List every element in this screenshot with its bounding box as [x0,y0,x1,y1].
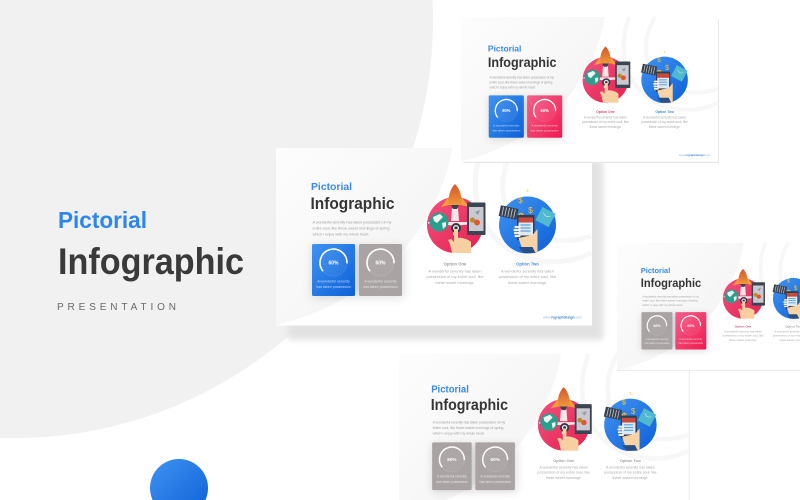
slide 2: top [461,17,718,162]
card: blue 60% [312,244,355,296]
card: pink 60%: has taken possession [678,341,704,345]
option two text: possession of my entire soul, like [499,274,556,279]
slide 3 bottom edge line [617,370,800,371]
icon: rocket and phone [427,184,486,253]
card shadow [489,97,564,139]
title: Infographic [310,194,394,213]
option one text: these sweet mornings. [436,280,474,285]
website credit: www.rvgraphdesign.com [679,153,711,157]
description: entire soul, like these sweet mornings of spring [433,426,503,430]
option two text [641,110,688,129]
option one text: these sweet mornings. [546,476,582,480]
description [312,220,392,236]
slide 4 right edge line [689,370,690,500]
card: blue 60%: has taken possession [492,128,521,132]
card: 60% right: 60% [491,457,500,462]
description: entire soul, like these sweet mornings of spring [642,299,698,303]
description [642,294,700,307]
title block [57,207,244,313]
heading: Pictorial: Pictorial [58,207,147,233]
title: Infographic [641,276,701,290]
website credit: www.rvgraphdesign.com [543,316,582,320]
card: pink 60% [675,312,706,350]
card: 60% left: has taken possession [436,480,468,484]
heading: Pictorial [431,385,469,396]
description: A wonderful serenity has taken possession of my [312,220,392,224]
description: which I enjoy with my whole heart. [312,232,370,236]
option two text: these sweet mornings. [649,125,681,129]
option two text: A wonderful serenity has taken [606,466,655,470]
slide 1 shadow [288,160,603,340]
card: grey 60%: has taken possession [363,285,398,289]
title: Infographic [431,397,508,414]
option one text [722,325,764,342]
option one text [537,459,590,480]
option one text [582,110,629,129]
option one text: Option One [735,325,752,329]
option one text: these sweet mornings. [590,125,621,129]
slide background [399,354,689,500]
option two text: A wonderful serenity has taken [643,116,686,120]
heading: Pictorial [641,266,670,275]
option two text: A wonderful serenity has taken [501,268,554,274]
icon: shopping phone [604,391,657,451]
decorative blue circle [150,459,208,500]
card: 60% right [475,442,515,490]
card: 60% left: 60% [447,457,457,462]
option one text: possession of my entire soul, like [426,274,484,279]
description: A wonderful serenity has taken possession of my [490,76,554,80]
option one text [426,262,484,285]
icon: shopping phone [641,50,688,103]
card shadow [432,444,517,492]
icon: shopping phone [773,273,800,319]
card: blue 60%: A wonderful serenity [493,124,520,128]
option one text: these sweet mornings. [729,338,757,342]
icon: rocket and phone [723,269,765,319]
card: blue 60%: has taken possession [316,285,351,289]
slide background [461,17,718,162]
slide 4: bottom [399,354,689,500]
description: entire soul, like these sweet mornings of spring [490,81,553,85]
icon: rocket and phone [538,387,592,451]
option two text: Option Two [516,262,539,266]
option one text: possession of my entire soul, like [582,120,629,124]
option one text: A wonderful serenity has taken [428,268,482,274]
subheading: PRESENTATION [57,302,176,313]
slide 1: main [276,148,592,326]
option two text: possession of my entire soul, like [641,120,688,124]
card: blue 60% [489,95,524,138]
option one text: A wonderful serenity has taken [539,466,588,470]
option one text: possession of my entire soul, like [722,334,764,338]
slide background [617,243,800,370]
card shadow [641,314,708,351]
card: pink 60%: A wonderful serenity [531,124,558,128]
background shape [0,0,433,438]
card: grey 60%: A wonderful serenity [364,280,397,284]
icon: shopping phone [499,189,556,254]
card: blue 60%: 60% [328,260,339,266]
icon: rocket and phone [583,46,630,103]
description: A wonderful serenity has taken possession of my [642,294,700,298]
option two text: these sweet mornings. [612,476,648,480]
description [490,76,554,89]
option two text [604,459,657,480]
card: blue 60%: 60% [502,108,511,113]
option two text: these sweet mornings. [508,280,547,285]
card: 60% right: A wonderful serenity [480,475,510,479]
card: grey 60%: A wonderful serenity [645,337,669,341]
description: which I enjoy with my whole heart. [490,85,536,89]
card: 60% left: A wonderful serenity [437,475,467,479]
option one text: A wonderful serenity has taken [724,330,762,334]
card: grey 60%: has taken possession [645,341,670,345]
card: grey 60% [359,244,402,296]
card: blue 60%: A wonderful serenity [317,280,350,284]
option one text: Option One [596,110,615,114]
card: pink 60%: 60% [687,324,695,328]
slide 2 edge shadow [463,19,719,163]
slide 3: right [617,243,800,370]
option one text: Option One [444,262,467,266]
slide background [276,148,592,326]
option one text: possession of my entire soul, like [537,471,590,475]
card: grey 60%: 60% [375,260,386,266]
description: which I enjoy with my whole heart. [642,303,683,307]
card: pink 60% [527,95,562,138]
card: 60% left [432,442,472,490]
option two text [773,325,800,342]
card: grey 60%: 60% [653,324,661,328]
title: Infographic [488,54,557,70]
heading: Pictorial [488,43,521,53]
heading: Infographic: Infographic [58,240,244,282]
option one text: A wonderful serenity has taken [584,116,627,120]
description: A wonderful serenity has taken possession of my [433,420,505,424]
option two text: Option Two [620,459,641,463]
option one text: Option One [553,459,575,463]
card: grey 60% [641,312,672,350]
card: 60% right: has taken possession [479,480,511,484]
description: entire soul, like these sweet mornings of spring [312,226,390,230]
option two text: possession of my entire soul, like [604,471,657,475]
option two text: Option Two [655,110,674,114]
card: pink 60%: 60% [541,108,549,113]
card shadow [312,246,404,298]
option two text [499,262,556,285]
card: pink 60%: has taken possession [531,128,559,132]
far-right slide [689,370,800,500]
heading: Pictorial [311,181,352,193]
description: which I enjoy with my whole heart. [433,431,485,435]
description [433,420,505,436]
card: pink 60%: A wonderful serenity [679,337,703,341]
